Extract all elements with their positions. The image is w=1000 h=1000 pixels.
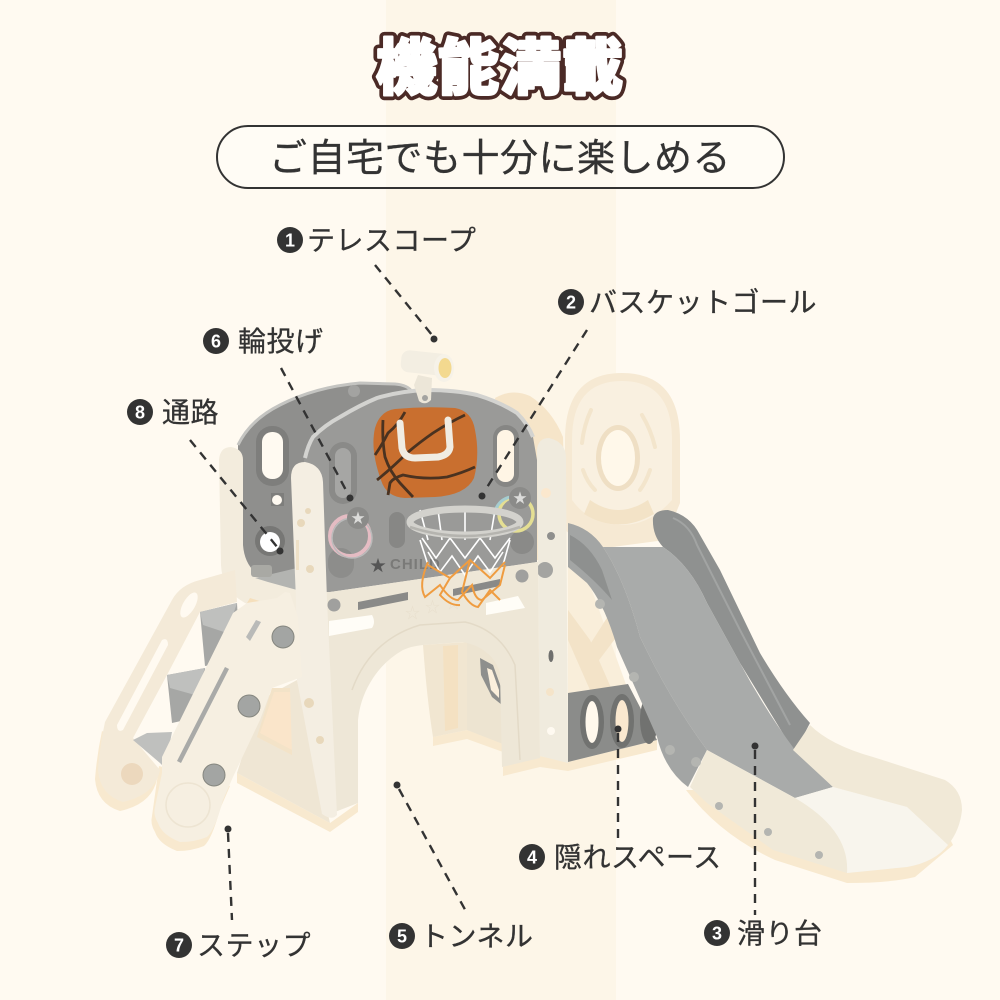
- label 1 telescope: 1: [285, 230, 295, 250]
- front cream body with tunnel arch: ☆: [425, 599, 440, 616]
- leader line 2: [478, 330, 587, 500]
- slide: [568, 510, 962, 873]
- label 8 passage: 8: [135, 402, 145, 422]
- leader line 8: [190, 440, 284, 554]
- gray stair steps: [133, 603, 240, 768]
- slide bed: [603, 547, 833, 798]
- leader line 3: [752, 742, 758, 915]
- label 4 hidden space: 隠れスペース: [554, 842, 722, 873]
- front cream body with tunnel arch: ☆: [405, 605, 420, 622]
- label 8 passage: 通路: [162, 397, 219, 428]
- tunnel interior: [423, 642, 503, 744]
- label 5 tunnel: トンネル: [420, 921, 533, 952]
- label 5 tunnel: 5: [397, 926, 407, 946]
- label 3 slide: 3: [712, 924, 722, 944]
- front stair stringer with bolts: [154, 592, 302, 842]
- label 3 slide: 滑り台: [737, 918, 823, 949]
- leader line 5: [394, 782, 468, 915]
- subtitle pill: ご自宅でも十分に楽しめる: [269, 138, 731, 180]
- basketball hoop and net: [410, 509, 520, 607]
- front gray wall: CHILD: [390, 556, 441, 573]
- hidden space gray panel: [568, 684, 658, 762]
- ground shadows: [95, 730, 953, 883]
- back left post: [219, 447, 297, 625]
- back stair stringer: [98, 570, 237, 802]
- far cream end: [793, 725, 962, 845]
- telescope: [400, 350, 454, 403]
- near rail: [568, 523, 707, 787]
- back arch panel: [495, 392, 566, 560]
- ring toss rings: ★: [513, 490, 527, 506]
- front left post: [291, 462, 337, 818]
- front gray wall: [304, 390, 537, 595]
- platform and bolt: [247, 565, 297, 611]
- label 7 step: 7: [174, 936, 184, 956]
- front gray wall: ★: [370, 558, 386, 575]
- label 2 basketball goal: 2: [566, 292, 576, 312]
- near cream end: [690, 750, 948, 873]
- label 7 step: ステップ: [197, 930, 311, 961]
- label 2 basketball goal: バスケットゴール: [589, 287, 817, 318]
- title: 機能満載: [376, 34, 624, 102]
- label 4 hidden space: 4: [527, 848, 537, 868]
- leader line 4: [614, 726, 622, 838]
- label 6 ring toss: 6: [211, 332, 221, 352]
- label 8 passage: [127, 397, 219, 428]
- far rail: [653, 510, 810, 750]
- basketball window: [373, 407, 477, 498]
- label 1 telescope: テレスコープ: [307, 225, 476, 256]
- back right post: [537, 438, 568, 763]
- back gray wall: [238, 383, 415, 575]
- leader line 7: [224, 826, 232, 920]
- product: play set illustration: [95, 350, 962, 883]
- tower side wall: [237, 680, 330, 823]
- ring toss rings: ★: [351, 510, 365, 526]
- cross brace behind slide: [568, 565, 628, 700]
- subtitle pill: [217, 126, 784, 188]
- front cream body with tunnel arch: [323, 562, 540, 812]
- title: 機能満載: [376, 34, 624, 102]
- front cream body with tunnel arch: ☆: [446, 595, 461, 612]
- ring toss rings: [330, 487, 533, 558]
- label 6 ring toss: 輪投げ: [238, 326, 324, 357]
- round panel with hole: [565, 373, 680, 550]
- leader line 6: [281, 368, 354, 502]
- leader line 1: [375, 265, 438, 342]
